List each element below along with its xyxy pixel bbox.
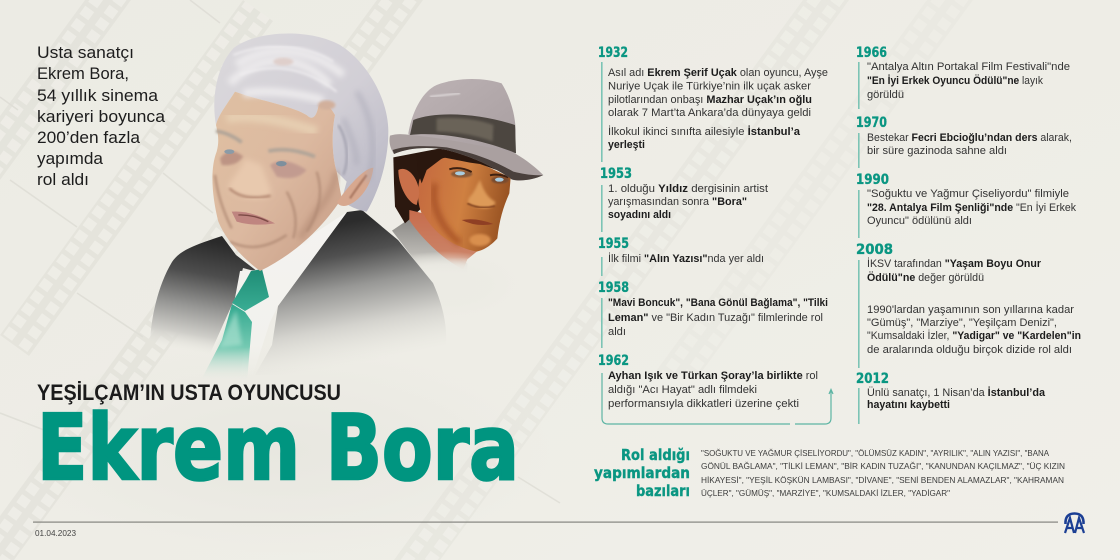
entry 1932: yerleşti xyxy=(608,139,645,151)
entry 1932: İlkokul ikinci sınıfta ailesiyle İstanbul’a xyxy=(608,125,800,138)
timeline column two xyxy=(856,45,1081,424)
entry 1932: Asıl adı Ekrem Şerif Uçak olan oyuncu, Ayşe xyxy=(608,67,828,79)
entry 1990: 1990 xyxy=(856,172,889,188)
entry 1990 xyxy=(856,172,1077,238)
entry 1990: "Soğuktu ve Yağmur Çiseliyordu" filmiyle xyxy=(867,188,1069,200)
entry 1953 xyxy=(600,166,768,232)
entry 1953: yarışmasından sonra "Bora" xyxy=(608,196,747,208)
entry 1962: Ayhan Işık ve Türkan Şoray’la birlikte rol xyxy=(608,370,818,382)
intro text: 200’den fazla xyxy=(37,128,141,147)
filmography list: GÖNÜL BAĞLAMA", "TİLKİ LEMAN", "BİR KADIN TUZAĞI", "KANUNDAN KAÇILMAZ", "ÜÇ KIZIN xyxy=(701,461,1065,471)
intro text: kariyeri boyunca xyxy=(37,107,166,126)
entry 1953: 1. olduğu Yıldız dergisinin artist xyxy=(608,183,768,195)
filmography heading xyxy=(594,446,690,500)
portrait: Ekrem Bora elderly xyxy=(150,210,446,382)
mist over young shoulder xyxy=(370,251,520,319)
date: 01.04.2023 xyxy=(35,528,76,538)
subtitle: YEŞİLÇAM’IN USTA OYUNCUSU xyxy=(37,380,341,405)
entry 1966: 1966 xyxy=(856,45,887,61)
entry 2008: "Gümüş", "Marziye", "Yeşilçam Denizi", xyxy=(867,317,1057,329)
entry 2008: Ödülü"ne değer görüldü xyxy=(867,271,984,284)
filmography heading: Rol aldığı xyxy=(621,446,690,464)
entry 2012: 2012 xyxy=(856,371,889,387)
filmography list: ÜÇLER", "GÜMÜŞ", "MARZİYE", "KUMSALDAKİ İZLER, "YADİGAR" xyxy=(701,488,950,498)
main title: Ekrem Bora xyxy=(37,396,519,501)
entry 1970 xyxy=(856,115,1072,168)
entry 1970: bir süre gazinoda sahne aldı xyxy=(867,145,1007,157)
entry 2008 xyxy=(856,242,1081,368)
young actor shoulder xyxy=(392,218,467,280)
entry 1932 xyxy=(598,45,828,162)
entry 1955 xyxy=(598,236,764,276)
suit xyxy=(150,210,446,375)
entry 1970: 1970 xyxy=(856,115,887,131)
entry 1966 xyxy=(856,45,1070,109)
head xyxy=(212,33,388,271)
young actor features xyxy=(417,149,511,246)
entry 1958: "Mavi Boncuk", "Bana Gönül Bağlama", "Tilki xyxy=(608,297,828,309)
young actor face xyxy=(418,156,511,252)
entry 1970: Bestekar Fecri Ebcioğlu’ndan ders alarak, xyxy=(867,132,1072,144)
hair highlights xyxy=(230,47,373,182)
entry 2008: 1990'lardan yaşamının son yıllarına kadar xyxy=(867,304,1074,316)
face details xyxy=(215,117,367,247)
hair xyxy=(214,33,388,212)
filmography heading: bazıları xyxy=(636,482,690,500)
entry 1932: pilotlarından onbaşı Mazhar Uçak’ın oğlu xyxy=(608,94,812,106)
entry 1932: 1932 xyxy=(598,45,628,61)
portrait: young actor with hat xyxy=(389,79,543,280)
filmography list: HİKAYESİ", "YEŞİL KÖŞKÜN LAMBASI", "DİVANE", "SENİ BENDEN ALAMAZLAR", "KAHRAMAN xyxy=(701,475,1064,485)
entry 1953: 1953 xyxy=(600,166,632,182)
ear xyxy=(337,168,373,206)
filmography heading: yapımlardan xyxy=(594,464,690,482)
entry 1932: Nuriye Uçak ile Türkiye’nin ilk uçak asker xyxy=(608,80,811,92)
young actor neck xyxy=(409,210,477,269)
intro text: yapımda xyxy=(37,149,104,168)
young actor ear xyxy=(398,169,419,205)
intro text xyxy=(37,43,166,189)
entry 2012: hayatını kaybetti xyxy=(867,399,950,411)
arrow connector to column two xyxy=(602,373,833,424)
entry 1932: olarak 7 Mart’ta Ankara’da dünyaya geldi xyxy=(608,107,811,119)
entry 2008: İKSV tarafından "Yaşam Boyu Onur xyxy=(867,257,1041,270)
entry 2008: "Kumsaldaki İzler, "Yadigar" ve "Kardelen"in xyxy=(867,329,1081,342)
entry 1962: 1962 xyxy=(598,353,629,369)
entry 1958: Leman" ve "Bir Kadın Tuzağı" filmlerinde rol xyxy=(608,312,823,324)
footer rule xyxy=(33,522,1058,523)
entry 1962: performansıyla dikkatleri üzerine çekti xyxy=(608,398,799,410)
entry 1966: "En İyi Erkek Oyuncu Ödülü"ne layık xyxy=(867,74,1044,87)
tie xyxy=(200,269,269,382)
entry 1990: Oyuncu" ödülünü aldı xyxy=(867,215,972,227)
intro text: Usta sanatçı xyxy=(37,43,134,62)
young actor hair xyxy=(393,148,463,223)
entry 1955: 1955 xyxy=(598,236,629,252)
entry 2008: de aralarında olduğu birçok dizide rol aldı xyxy=(867,344,1072,356)
entry 2012 xyxy=(856,371,1045,424)
filmography list xyxy=(701,448,1065,498)
face xyxy=(212,92,342,271)
filmography list: "SOĞUKTU VE YAĞMUR ÇİSELİYORDU", "ÖLÜMSÜZ KADIN", "AYRILIK", "ALIN YAZISI", "BANA xyxy=(701,448,1050,458)
intro text: 54 yıllık sinema xyxy=(37,86,159,105)
hat xyxy=(389,79,543,181)
intro text: Ekrem Bora, xyxy=(37,64,129,83)
entry 1958: 1958 xyxy=(598,280,629,296)
entry 1953: soyadını aldı xyxy=(608,209,671,221)
entry 1990: "28. Antalya Film Şenliği"nde "En İyi Erkek xyxy=(867,201,1077,214)
entry 1958: aldı xyxy=(608,326,626,338)
shirt xyxy=(235,212,347,378)
entry 2008: 2008 xyxy=(856,242,893,258)
entry 1958 xyxy=(598,280,828,348)
entry 1955: İlk filmi "Alın Yazısı"nda yer aldı xyxy=(608,252,764,265)
icon: AA logo xyxy=(1065,514,1084,533)
entry 2012: Ünlü sanatçı, 1 Nisan’da İstanbul’da xyxy=(867,386,1045,399)
entry 1962 xyxy=(598,353,833,424)
entry 1966: görüldü xyxy=(867,89,904,101)
entry 1966: "Antalya Altın Portakal Film Festivali"nde xyxy=(867,61,1070,73)
timeline column one xyxy=(598,45,833,424)
entry 1962: aldığı "Acı Hayat" adlı filmdeki xyxy=(608,384,757,396)
intro text: rol aldı xyxy=(37,170,89,189)
